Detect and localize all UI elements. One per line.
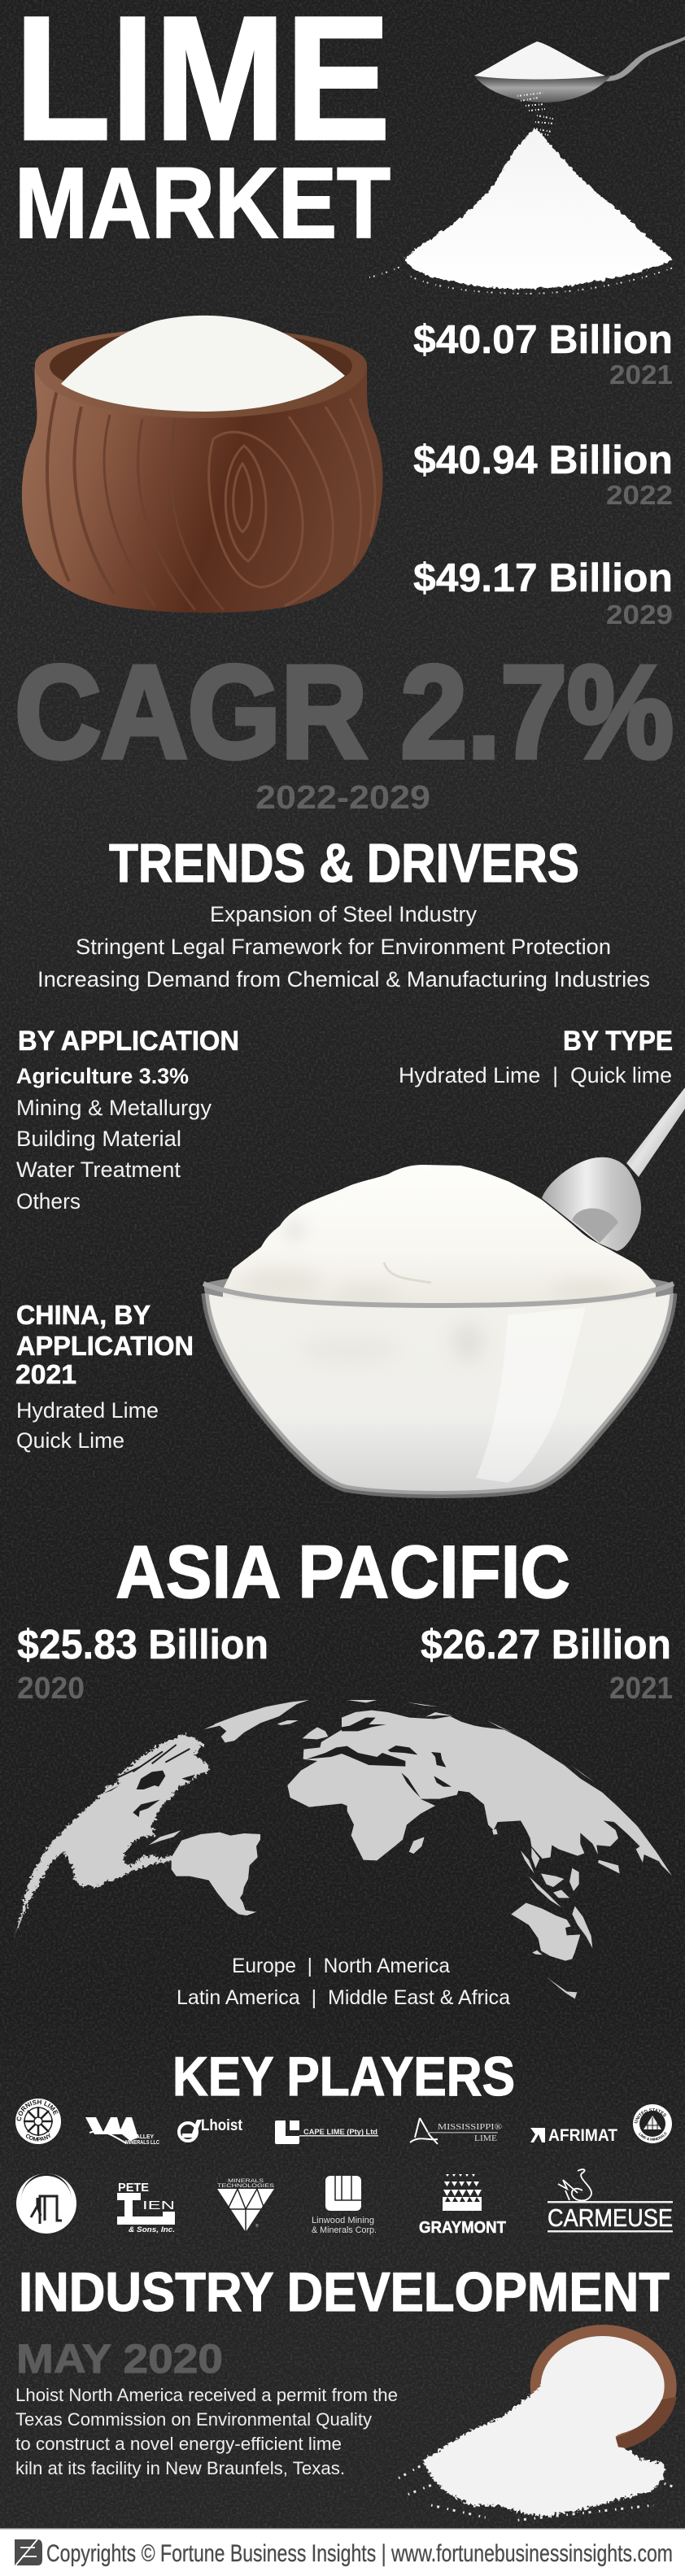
footer band: [0, 2528, 685, 2576]
panel: company logos: [15, 2099, 673, 2237]
body text: Texas Commission on Environmental Quality: [15, 2409, 372, 2430]
item building: Building Material: [16, 1127, 181, 1151]
item mining: Mining & Metallurgy: [16, 1096, 212, 1120]
logo: United States Lime: UNITED STATES: [634, 2108, 666, 2123]
bowl lower lip: [616, 2397, 677, 2448]
item others: Others: [16, 1189, 81, 1214]
logo: Pete Lien and Sons: [117, 2181, 175, 2234]
world map: [14, 1700, 672, 1998]
panel: trends and drivers: [37, 833, 650, 992]
icon: wooden bowl of lime: [22, 316, 383, 612]
logo: Valley Minerals: MINERALS LLC: [125, 2140, 159, 2146]
UK and Ireland: [303, 1727, 328, 1739]
bowl back edge: [203, 1269, 674, 1310]
heading: BY TYPE: [563, 1026, 673, 1057]
logo: United States Lime: [633, 2104, 672, 2143]
bowl: [530, 2325, 677, 2447]
body text: [15, 2385, 398, 2478]
bowl body: [205, 1293, 674, 1495]
New Zealand: [548, 1978, 577, 1998]
title line: MARKET: MARKET: [15, 148, 390, 259]
bowl body: [22, 328, 383, 612]
icon: spoon pouring lime onto a pile: [369, 37, 685, 294]
panel: by type: [399, 1026, 673, 1087]
lime heap: [61, 316, 345, 412]
panel: Asia Pacific: [17, 1531, 673, 1706]
types: Hydrated Lime | Quick lime: [399, 1063, 672, 1087]
seas: [307, 1718, 452, 1798]
spoon: [474, 37, 685, 102]
scattered grains: [369, 265, 675, 294]
logo: Carmeuse: [548, 2169, 673, 2232]
title: Lime Market: [15, 0, 390, 259]
Madagascar: [409, 1837, 425, 1854]
logo: round lime kiln mark: [16, 2173, 76, 2234]
logo: Minerals Technologies: TECHNOLOGIES: [217, 2183, 275, 2189]
logo: Minerals Technologies: MINERALS: [228, 2178, 264, 2184]
scoop handle: [626, 1087, 685, 1177]
date: MAY 2020: [16, 2336, 223, 2382]
logo: Pete Lien and Sons: & Sons, Inc.: [129, 2225, 175, 2234]
icon: tipped bowl spilling lime: [399, 2325, 679, 2520]
body text: Lhoist North America received a permit from the: [15, 2385, 398, 2405]
body text: to construct a novel energy-efficient lime: [15, 2434, 342, 2454]
heading line 2: APPLICATION: [16, 1331, 194, 1361]
item water: Water Treatment: [16, 1157, 181, 1182]
year 2020: 2020: [17, 1672, 85, 1706]
logo: Cape Lime: [275, 2121, 378, 2144]
heading: TRENDS & DRIVERS: [109, 833, 579, 894]
logo: Cornish Lime: [15, 2099, 61, 2144]
driver 1: Expansion of Steel Industry: [210, 902, 477, 926]
lime pile: [404, 129, 673, 289]
logo: Afrimat: AFRIMAT: [548, 2126, 617, 2145]
bowl rim: [35, 328, 367, 418]
logo: Graymont: [419, 2174, 506, 2237]
value 2022: $40.94 Billion: [413, 438, 673, 482]
other regions: [177, 1955, 510, 2009]
year 2021: 2021: [609, 1672, 673, 1706]
icon: Fortune Business Insights logo: [15, 2539, 42, 2565]
Sri Lanka: [492, 1828, 498, 1835]
value 2020: $25.83 Billion: [17, 1621, 268, 1667]
lime mound: [223, 1165, 656, 1310]
year 2022: 2022: [606, 480, 673, 510]
logo: Cape Lime: CAPE LIME (Pty) Ltd: [303, 2128, 377, 2136]
panel: by application: [16, 1026, 239, 1214]
item hydrated: Hydrated Lime: [16, 1398, 159, 1423]
value 2021: $26.27 Billion: [421, 1621, 671, 1667]
logo: Minerals Technologies: ®: [255, 2223, 259, 2229]
logo: Mississippi Lime: [410, 2118, 502, 2144]
CAGR: [15, 639, 674, 816]
South America: [172, 1833, 260, 1916]
driver 2: Stringent Legal Framework for Environment Protection: [76, 935, 611, 959]
body text: kiln at its facility in New Braunfels, Texas.: [15, 2458, 345, 2478]
North and Central America: [14, 1734, 209, 1937]
logo: Pete Lien and Sons: PETE: [118, 2181, 149, 2195]
footer: [0, 2528, 685, 2576]
year 2029: 2029: [606, 599, 673, 630]
panel: China by application: [15, 1300, 194, 1453]
Arctic channels: [116, 1724, 214, 1778]
panel: industry development: [15, 2261, 670, 2478]
logo: Pete Lien and Sons: IEN: [142, 2199, 175, 2212]
falling grains: [517, 93, 555, 135]
bowl shading: [301, 1323, 484, 1365]
logo: Valley Minerals: [85, 2117, 159, 2146]
market size values: [413, 318, 673, 630]
Australia: [511, 1903, 580, 1961]
regions line 1: Europe | North America: [232, 1955, 450, 1977]
bowl rim: [203, 1284, 674, 1305]
Iceland: [277, 1720, 299, 1725]
logo: Linwood Mining: Linwood Mining: [312, 2216, 374, 2225]
CAGR period: 2022-2029: [255, 778, 430, 816]
heading: CHINA, BY: [16, 1300, 151, 1330]
logo: Mississippi Lime: LIME: [474, 2134, 497, 2143]
logo: Cornish Lime: COMPANY: [26, 2133, 50, 2142]
Hudson Bay and lakes: [103, 1771, 195, 1817]
item quick: Quick Lime: [16, 1428, 124, 1453]
bowl highlight: [476, 1307, 586, 1483]
scoop: [542, 1157, 641, 1251]
Cuba: [149, 1830, 181, 1845]
spilled lime: [423, 2373, 665, 2516]
logo: Graymont: GRAYMONT: [419, 2219, 506, 2237]
logo: Minerals Technologies: [217, 2178, 275, 2232]
Greenland: [202, 1700, 309, 1742]
bowl glass edge: [205, 1293, 674, 1495]
heading: BY APPLICATION: [18, 1026, 239, 1057]
logo: Lhoist: Lhoist: [201, 2117, 243, 2134]
logo: Lhoist: [179, 2117, 243, 2141]
loose grains: [399, 2465, 679, 2520]
Indonesia and Philippines: [521, 1848, 620, 1907]
Arctic islands: [347, 1700, 596, 1783]
driver 3: Increasing Demand from Chemical & Manufacturing Industries: [37, 967, 650, 992]
mound shading: [240, 1222, 622, 1301]
Africa and Eurasia: [287, 1700, 672, 1998]
logo: United States Lime: LIME & MINERALS: [639, 2132, 667, 2141]
logo: Linwood Mining: & Minerals Corp.: [312, 2225, 377, 2235]
mound fold: [384, 1262, 431, 1283]
logo: Valley Minerals: VALLEY: [133, 2134, 154, 2140]
regions line 2: Latin America | Middle East & Africa: [177, 1986, 510, 2009]
icon: glass bowl of lime with scoop: [203, 1087, 685, 1495]
logo: Mississippi Lime: MISSISSIPPI®: [438, 2123, 502, 2132]
heading: key players: KEY PLAYERS: [172, 2046, 515, 2107]
year 2021: 2021: [609, 360, 673, 390]
logo: Linwood Mining: [312, 2176, 377, 2235]
logo: Cornish Lime: CORNISH LIME: [16, 2099, 59, 2121]
item agriculture: Agriculture 3.3%: [16, 1064, 189, 1088]
heading line 3: 2021: [15, 1359, 76, 1389]
value 2029: $49.17 Billion: [413, 556, 673, 600]
New Guinea: [572, 1906, 592, 1948]
heading: ASIA PACIFIC: [116, 1531, 570, 1614]
value 2021: $40.07 Billion: [413, 318, 673, 362]
wood grain: [47, 390, 375, 610]
